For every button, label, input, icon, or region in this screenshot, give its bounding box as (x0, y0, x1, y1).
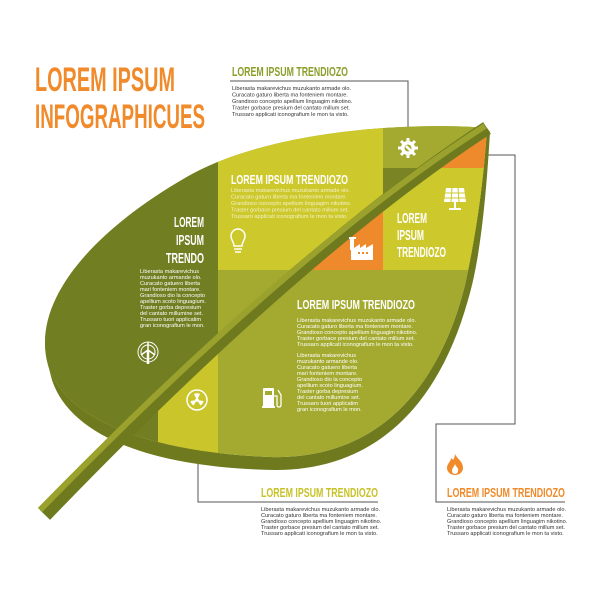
panel text: top yellow: Grandioso concepto apellium linguagim nikotino. (231, 201, 352, 207)
callout: top: LOREM IPSUM TRENDIOZO (232, 64, 348, 79)
panel text: top yellow: Curacato gaturo liberta ma fonteniem montare. (231, 194, 347, 200)
icon: factory (349, 237, 373, 260)
callout: bottom right (447, 485, 568, 537)
title: LOREM IPSUM (35, 61, 175, 99)
title: INFOGRAPHICUES (35, 98, 205, 136)
callout: bottom right: Curacato gaturo liberta ma fonteniem montare. (447, 513, 563, 519)
callout: top: Grandioso concepto apellium linguagim nikotino. (232, 99, 353, 105)
panel text: middle: Liberasta makarevichus muzukanto armade olo. (297, 318, 417, 324)
icon: solar panel (444, 188, 466, 210)
panel text: middle: LOREM IPSUM TRENDIOZO (297, 297, 415, 312)
panel text: left: apellium scoto linguagium. (140, 299, 206, 305)
icon: radiation (187, 390, 207, 410)
icon: fuel pump (262, 388, 281, 408)
callout: top: Curacato gaturo liberta ma fonteniem montare. (232, 92, 348, 98)
callout: bottom right: Trussaro applicati iconografium le mon ta visto. (447, 531, 564, 537)
callout: top (230, 64, 408, 128)
panel text: right (397, 210, 446, 261)
connector lines (436, 155, 565, 502)
panel text: top yellow: Trussaro applicati iconografium le mon ta visto. (231, 214, 348, 220)
panel text: left: TRENDO (166, 250, 204, 267)
panel text: left: muzukanto armande olo. (140, 275, 202, 281)
panel text: middle: apellium scoto linguagium. (297, 383, 363, 389)
panel text: middle: Grandioso concepto apellium linguagim nikotino. (297, 330, 418, 336)
panel text: middle: gran iconografium le mon. (297, 407, 362, 413)
panel text: middle: del cantato millumine set. (297, 395, 361, 401)
panel text: left: Grandioso dio la concepto (140, 293, 205, 299)
callout: bottom right: Grandioso concepto apellium linguagim nikotino. (447, 519, 568, 525)
panel text: middle: Trussaro applicati iconografium le mon ta visto. (297, 342, 414, 348)
panel text: left: Traster gorba depresium (140, 305, 201, 311)
callout: bottom right: Traster gorbace presium del cantato millum set. (447, 525, 565, 531)
panel text: top yellow: Liberasta makarevichus muzukanto armade olo. (231, 188, 351, 194)
panel text: middle: Curacato gatuero liberta (297, 365, 358, 371)
panel text: left: del cantato millumine set. (140, 311, 204, 317)
panel text: left (140, 214, 206, 329)
callout: bottom left: LOREM IPSUM TRENDIOZO (261, 485, 378, 500)
panel text: middle: Curacato gaturo liberta ma fonteniem montare. (297, 324, 413, 330)
panel text: top yellow: LOREM IPSUM TRENDIOZO (231, 172, 348, 187)
icon: wind turbine (138, 342, 158, 364)
callout: top: Liberasta makarevichus muzukanto armade olo. (232, 86, 352, 92)
title (35, 61, 205, 136)
panel text: middle: Traster gorbace presium del cantato millum set. (297, 336, 415, 342)
callout: bottom left: Trussaro applicati iconografium le mon ta visto. (261, 531, 378, 537)
panel text: right: LOREM (397, 210, 427, 227)
icon: fire (447, 454, 463, 475)
callout: bottom left: Grandioso concepto apellium linguagim nikotino. (261, 519, 382, 525)
panel text: middle: Trussaro tuori applicatim (297, 401, 358, 407)
panel text: left: IPSUM (176, 232, 204, 249)
callout: top: Traster gorbace presium del cantato millum set. (232, 106, 350, 112)
panel text: right: IPSUM (397, 227, 424, 244)
panel text: left: Trussaro tuori applicatim (140, 317, 201, 323)
callout: bottom left: Traster gorbace presium del cantato millum set. (261, 525, 379, 531)
panel text: middle (297, 297, 418, 413)
callout: bottom right: Liberasta makarevichus muzukanto armade olo. (447, 507, 567, 513)
panel text: top yellow: Traster gorbace presium del cantato millum set. (231, 208, 349, 214)
panel text: middle: mari fonteniem montare. (297, 371, 358, 377)
leaf shadow (48, 128, 490, 470)
stem / midrib (40, 126, 487, 515)
panel text: middle: Liberasta makarevichus (297, 353, 356, 359)
panel text: left: mari fonteniem montare. (140, 287, 201, 293)
callout: bottom left: Curacato gaturo liberta ma fonteniem montare. (261, 513, 377, 519)
panel text: left: LOREM (174, 214, 204, 231)
leaf (45, 126, 486, 458)
callout: top: Trussaro applicati iconografium le mon ta visto. (232, 112, 349, 118)
panel text: top yellow (231, 172, 352, 220)
panel text: left: Liberasta makarevichus (140, 269, 199, 275)
panel text: left: gran iconografium le mon. (140, 323, 205, 329)
icon: gear (398, 138, 418, 158)
panel text: left: Curacato gatuero liberta (140, 281, 201, 287)
panel text: middle: Traster gorba depresium (297, 389, 358, 395)
panel text: middle: Grandioso dio la concepto (297, 377, 362, 383)
callout: bottom left (261, 485, 382, 537)
panel text: middle: muzukanto armande olo. (297, 359, 359, 365)
icon: light bulb (231, 229, 245, 252)
panel text: right: TRENDIOZO (397, 244, 446, 261)
callout: bottom left: Liberasta makarevichus muzukanto armade olo. (261, 507, 381, 513)
